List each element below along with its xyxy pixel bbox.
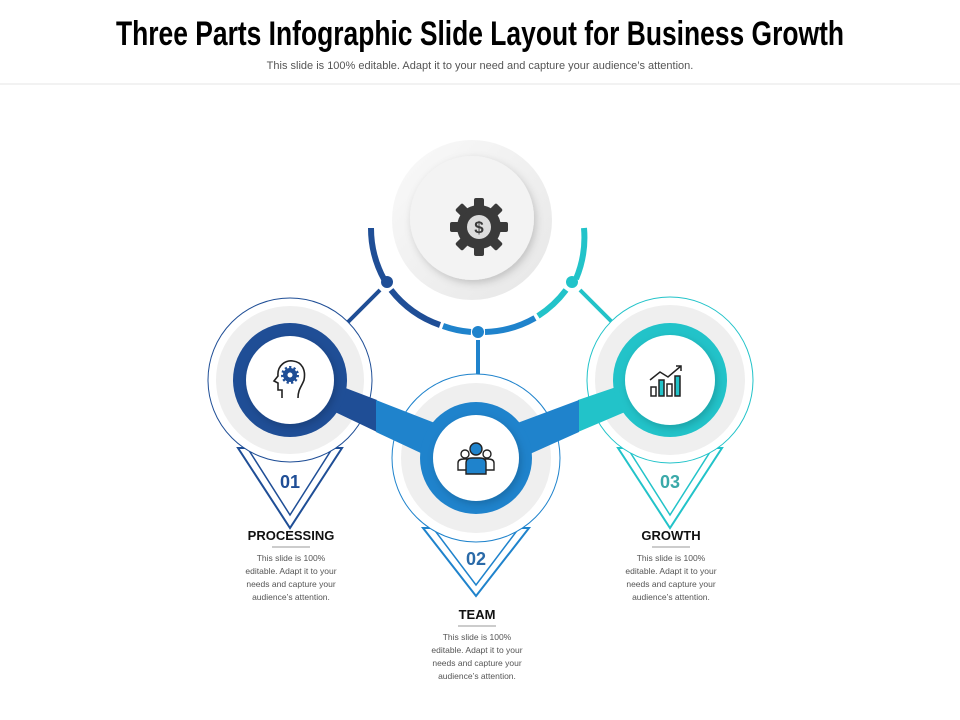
triangle pin 01 bbox=[238, 448, 342, 528]
text block: This slide is 100% bbox=[257, 553, 326, 563]
icon: head with gear bbox=[274, 361, 305, 398]
panel: processing bbox=[233, 323, 347, 602]
text block: audience’s attention. bbox=[438, 671, 516, 681]
text block bbox=[431, 632, 523, 681]
text block: editable. Adapt it to your bbox=[431, 645, 523, 655]
triangle pins and outer rings bbox=[208, 297, 753, 596]
text block: audience’s attention. bbox=[632, 592, 710, 602]
icon: bar chart growth bbox=[650, 366, 681, 396]
connector bands bbox=[335, 384, 625, 462]
text block: editable. Adapt it to your bbox=[625, 566, 717, 576]
text block: audience’s attention. bbox=[252, 592, 330, 602]
icon: team bbox=[458, 443, 494, 474]
text block bbox=[245, 553, 337, 602]
text block: editable. Adapt it to your bbox=[245, 566, 337, 576]
panel: growth bbox=[613, 323, 727, 602]
triangle pin 03 bbox=[618, 448, 722, 528]
panel: team bbox=[420, 402, 532, 681]
text block: needs and capture your bbox=[246, 579, 336, 589]
triangle pin 02 bbox=[423, 528, 529, 596]
subtitle: This slide is 100% editable. Adapt it to your need and capture your audience’s attention. bbox=[267, 60, 693, 72]
label processing: PROCESSING bbox=[248, 528, 334, 543]
number 02: 02 bbox=[466, 549, 486, 569]
arc connector bbox=[348, 228, 612, 376]
icon: gear dollar bbox=[438, 186, 520, 268]
label growth: GROWTH bbox=[641, 528, 701, 543]
top circle with gear dollar icon bbox=[392, 140, 552, 300]
text block: This slide is 100% bbox=[443, 632, 512, 642]
number 03: 03 bbox=[660, 472, 680, 492]
text block: needs and capture your bbox=[432, 658, 522, 668]
text block bbox=[625, 553, 717, 602]
label team: TEAM bbox=[459, 607, 495, 622]
number 01: 01 bbox=[280, 472, 300, 492]
text block: This slide is 100% bbox=[637, 553, 706, 563]
text block: needs and capture your bbox=[626, 579, 716, 589]
icon: gear dollar: $ bbox=[474, 218, 484, 237]
